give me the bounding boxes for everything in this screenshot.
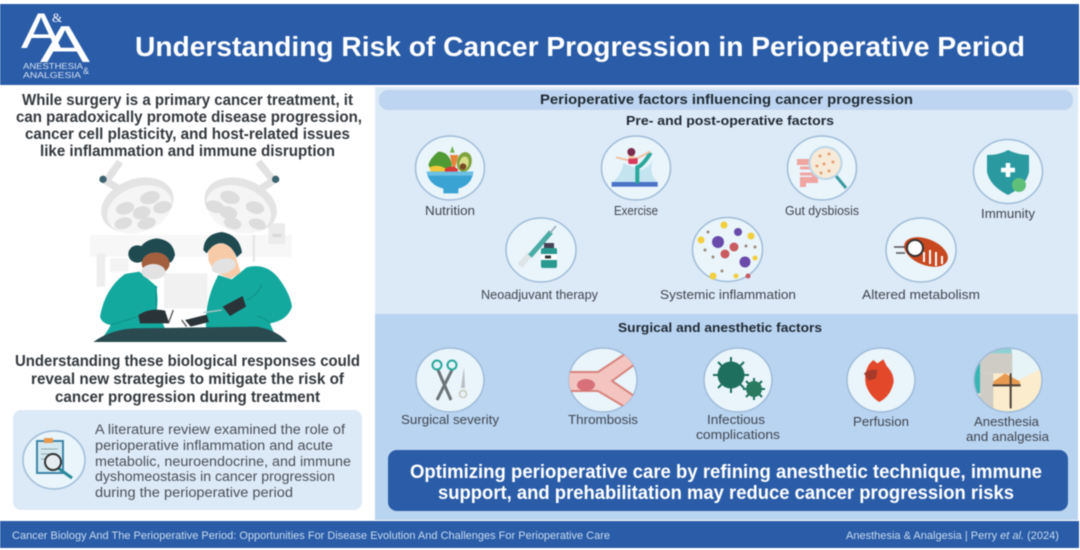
review description: during the perioperative period [95,485,293,500]
panel: perioperative factors [375,87,1078,314]
section heading pill: Perioperative factors influencing cancer progression [540,91,913,107]
intro text block: cancer cell plasticity, and host-related issues [25,126,350,143]
intro text block: can paradoxically promote disease progression, [16,109,362,126]
logo: Anesthesia & Analgesia: & [52,10,62,25]
header banner [0,3,1079,85]
factor: exercise: Exercise [614,204,658,218]
factor: nutrition [416,136,484,218]
footer: citation: Anesthesia & Analgesia | Perry et al. (2024) [846,530,1059,542]
factor: nutrition: Nutrition [425,204,475,218]
logo: Anesthesia & Analgesia: A [21,3,62,59]
right surgeon [168,232,292,335]
factor: infectious complications: Infectious [707,413,765,427]
callout: key takeaway: Optimizing perioperative care by refining anesthetic technique, immune [410,461,1042,483]
left surgeon [100,238,175,337]
review description [95,422,351,500]
review description: dyshomeostasis in cancer progression [95,469,335,484]
subheading: surgical and anesthetic: Surgical and anesthetic factors [618,320,822,335]
logo: Anesthesia & Analgesia: & [83,66,89,76]
factor: neoadjuvant therapy [481,218,599,302]
conclusion text block [15,353,360,406]
review description: metabolic, neuroendocrine, and immune [95,454,351,469]
subheading: pre- and post-operative: Pre- and post-operative factors [626,113,834,128]
section heading pill [379,90,1073,110]
factor: systemic inflammation [660,218,796,302]
factor: anesthesia and analgesia: and analgesia [966,430,1049,444]
operating table [93,327,287,342]
title: Understanding Risk of Cancer Progression in Perioperative Period [135,31,1025,62]
logo: Anesthesia & Analgesia [21,3,90,80]
factor: perfusion [847,348,915,429]
factor: thrombosis: Thrombosis [568,413,638,427]
factor: infectious complications: complications [696,428,780,442]
icon: clipboard and magnifier [23,431,85,489]
logo: Anesthesia & Analgesia: ANESTHESIA [23,61,83,71]
factor: surgical severity: Surgical severity [401,413,500,427]
factor: surgical severity [401,348,500,427]
factor: exercise [602,136,670,218]
logo: Anesthesia & Analgesia: A [40,16,90,74]
logo: Anesthesia & Analgesia: ANALGESIA [23,70,81,80]
conclusion text block: cancer progression during treatment [55,389,321,406]
review description: perioperative inflammation and acute [95,438,333,453]
footer: article title: Cancer Biology And The Perioperative Period: Opportunities For Disease Evolution And Challenges For Perioperative Care [12,530,610,542]
factor: anesthesia and analgesia [966,347,1049,444]
intro text block: like inflammation and immune disruption [40,143,335,160]
factor: altered metabolism: Altered metabolism [862,288,980,302]
factor: thrombosis [565,348,640,427]
factor: perfusion: Perfusion [853,415,909,429]
illustration: surgeons operating under lamps [90,162,292,342]
factor: neoadjuvant therapy: Neoadjuvant therapy [481,288,599,302]
conclusion text block: Understanding these biological responses could [15,353,360,370]
review description: A literature review examined the role of [95,422,345,437]
conclusion text block: reveal new strategies to mitigate the risk of [31,371,345,388]
intro text block [16,92,362,160]
factor: immunity [974,140,1042,221]
faint background equipment [90,223,292,308]
factor: immunity: Immunity [981,207,1036,221]
factor: altered metabolism [862,218,980,302]
footer bar [0,521,1079,548]
factor: gut dysbiosis: Gut dysbiosis [785,204,859,218]
factor: infectious complications [696,348,780,442]
panel: literature review [13,410,362,510]
factor: systemic inflammation: Systemic inflammation [660,288,796,302]
intro text block: While surgery is a primary cancer treatment, it [22,92,353,109]
callout: key takeaway [388,450,1068,511]
factor: anesthesia and analgesia: Anesthesia [974,415,1039,429]
surgical lamps [93,162,285,242]
panel: surgical and anesthetic factors [375,314,1078,520]
factor: gut dysbiosis [785,136,859,218]
callout: key takeaway: support, and prehabilitation may reduce cancer progression risks [438,482,1014,504]
